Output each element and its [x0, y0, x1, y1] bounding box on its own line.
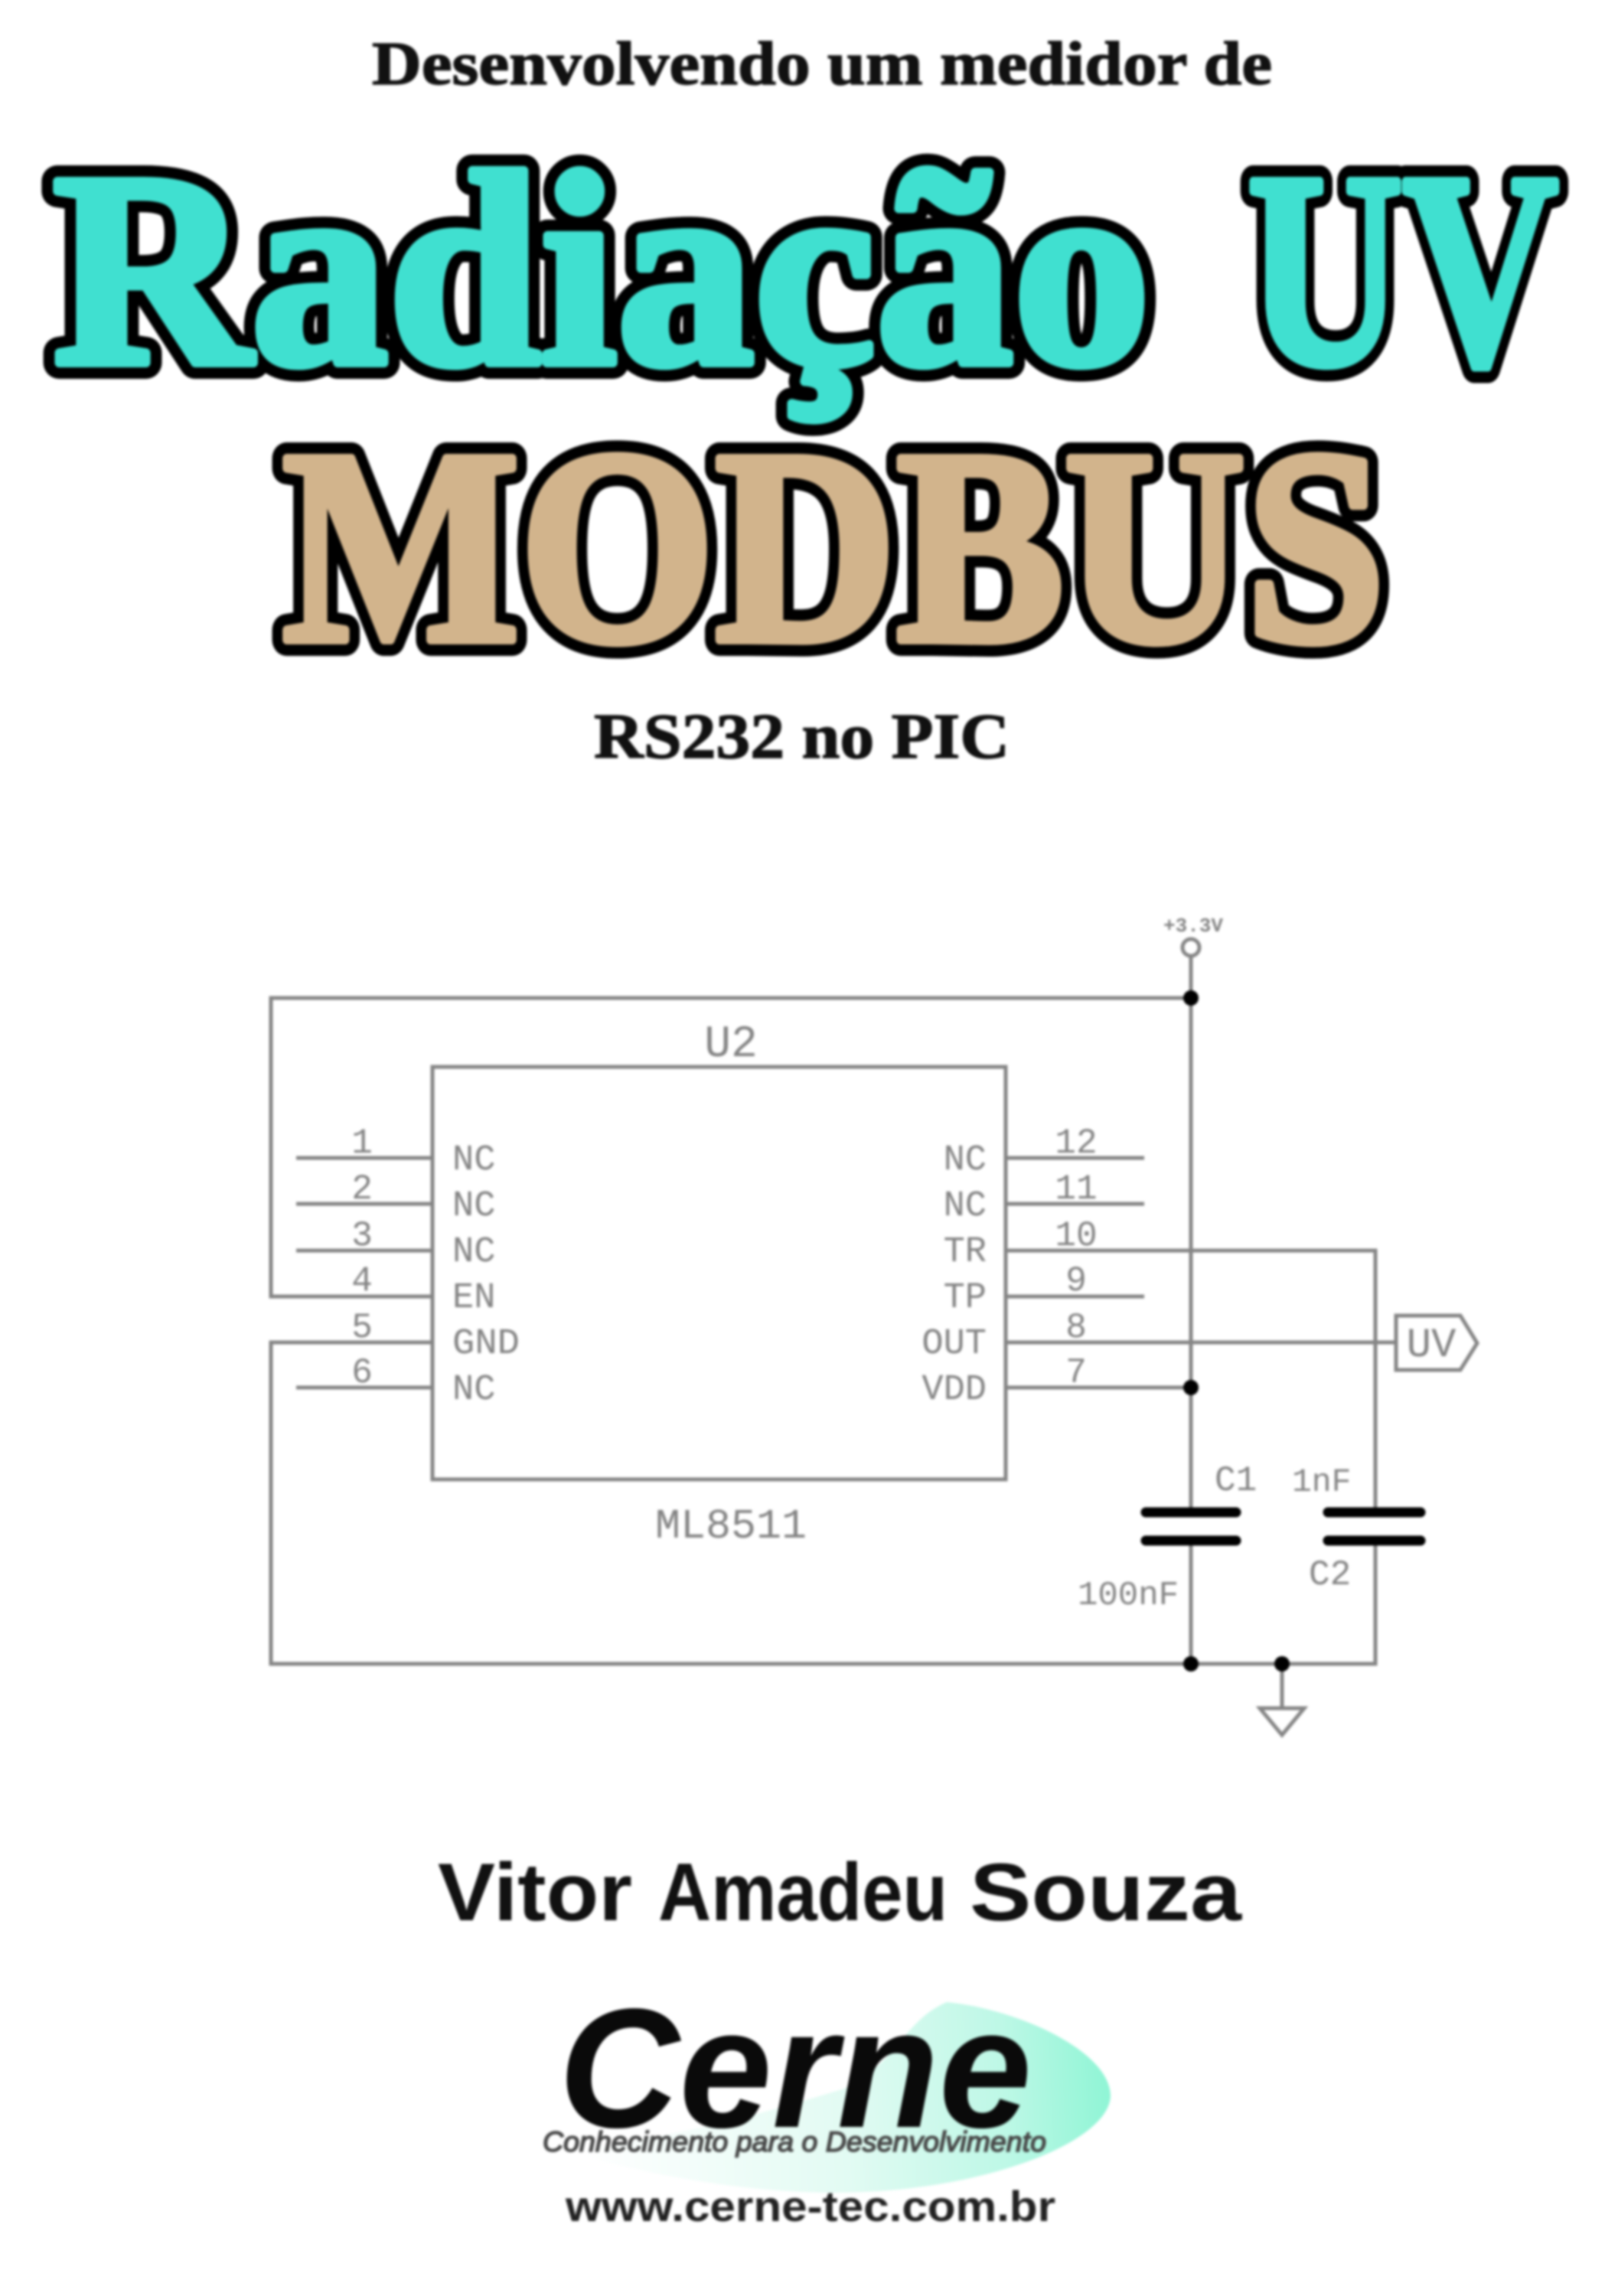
power terminal [1163, 915, 1223, 956]
chart: ML8511 circuit schematic [271, 915, 1477, 1735]
left pin numbers: 1 [351, 1124, 373, 1163]
component labels: U2 [704, 1020, 758, 1070]
capacitor plates C1 and C2 [1146, 1512, 1421, 1541]
component labels [655, 1020, 1351, 1615]
left pin names: NC [452, 1186, 495, 1227]
logo tagline: Conhecimento para o Desenvolvimento [543, 2126, 1046, 2157]
right pin names: NC [944, 1140, 987, 1181]
title: MODBUS: MODBUS [282, 393, 1385, 700]
right pin numbers: 7 [1065, 1353, 1087, 1393]
subheading: RS232 no PIC: RS232 no PIC [594, 701, 1010, 772]
left pin numbers: 2 [351, 1169, 373, 1209]
junction dots [1183, 990, 1290, 1671]
title: MODBUS: MODBUS [282, 393, 1385, 700]
logo swoosh [566, 2002, 1111, 2193]
left pin names: GND [452, 1324, 520, 1365]
right pin names: OUT [922, 1324, 987, 1365]
website URL: www.cerne-tec.com.br [565, 2182, 1055, 2230]
title: Radiação UV: Radiação [53, 116, 1150, 423]
right pin numbers: 11 [1055, 1169, 1098, 1209]
UV output flag: UV [1407, 1322, 1457, 1369]
left pin numbers: 5 [351, 1308, 373, 1348]
right pin names: TR [944, 1232, 987, 1273]
right pin numbers: 10 [1055, 1216, 1098, 1256]
left pin names [452, 1140, 520, 1411]
component labels: ML8511 [655, 1502, 807, 1551]
heading: Desenvolvendo um medidor de: Desenvolvendo um medidor de [372, 31, 1272, 98]
left pin numbers: 6 [351, 1353, 373, 1393]
author name: Amadeu [658, 1846, 948, 1938]
right pin numbers: 8 [1065, 1308, 1087, 1348]
right pin names: VDD [922, 1370, 987, 1411]
right pin numbers: 9 [1065, 1261, 1087, 1301]
logo wordmark: Cerne [559, 1974, 1032, 2164]
right pin names [922, 1140, 987, 1411]
author name: Souza [970, 1846, 1243, 1938]
component labels: C2 [1309, 1555, 1351, 1595]
component labels: C1 [1215, 1461, 1257, 1501]
logo: Cerne [543, 1974, 1111, 2193]
author name [438, 1846, 1243, 1938]
left pin numbers: 4 [351, 1261, 373, 1301]
wires [271, 957, 1396, 1708]
author name: Vitor [438, 1846, 632, 1938]
component labels: 100nF [1078, 1577, 1179, 1615]
right pin names: NC [944, 1186, 987, 1227]
right pin names: TP [944, 1278, 987, 1319]
left pin numbers [351, 1124, 373, 1393]
left pin numbers: 3 [351, 1216, 373, 1256]
left pin names: NC [452, 1370, 495, 1411]
ground symbol [1260, 1708, 1304, 1735]
right pin numbers [1055, 1124, 1098, 1393]
IC body U2 [432, 1067, 1006, 1479]
title: Radiação UV: Radiação [53, 116, 1150, 423]
left pin names: EN [452, 1278, 495, 1319]
left pin names: NC [452, 1232, 495, 1273]
right pin numbers: 12 [1055, 1124, 1098, 1163]
left pin names: NC [452, 1140, 495, 1181]
power terminal: +3.3V [1163, 915, 1223, 938]
component labels: 1nF [1292, 1463, 1351, 1501]
UV output flag [1396, 1316, 1477, 1370]
